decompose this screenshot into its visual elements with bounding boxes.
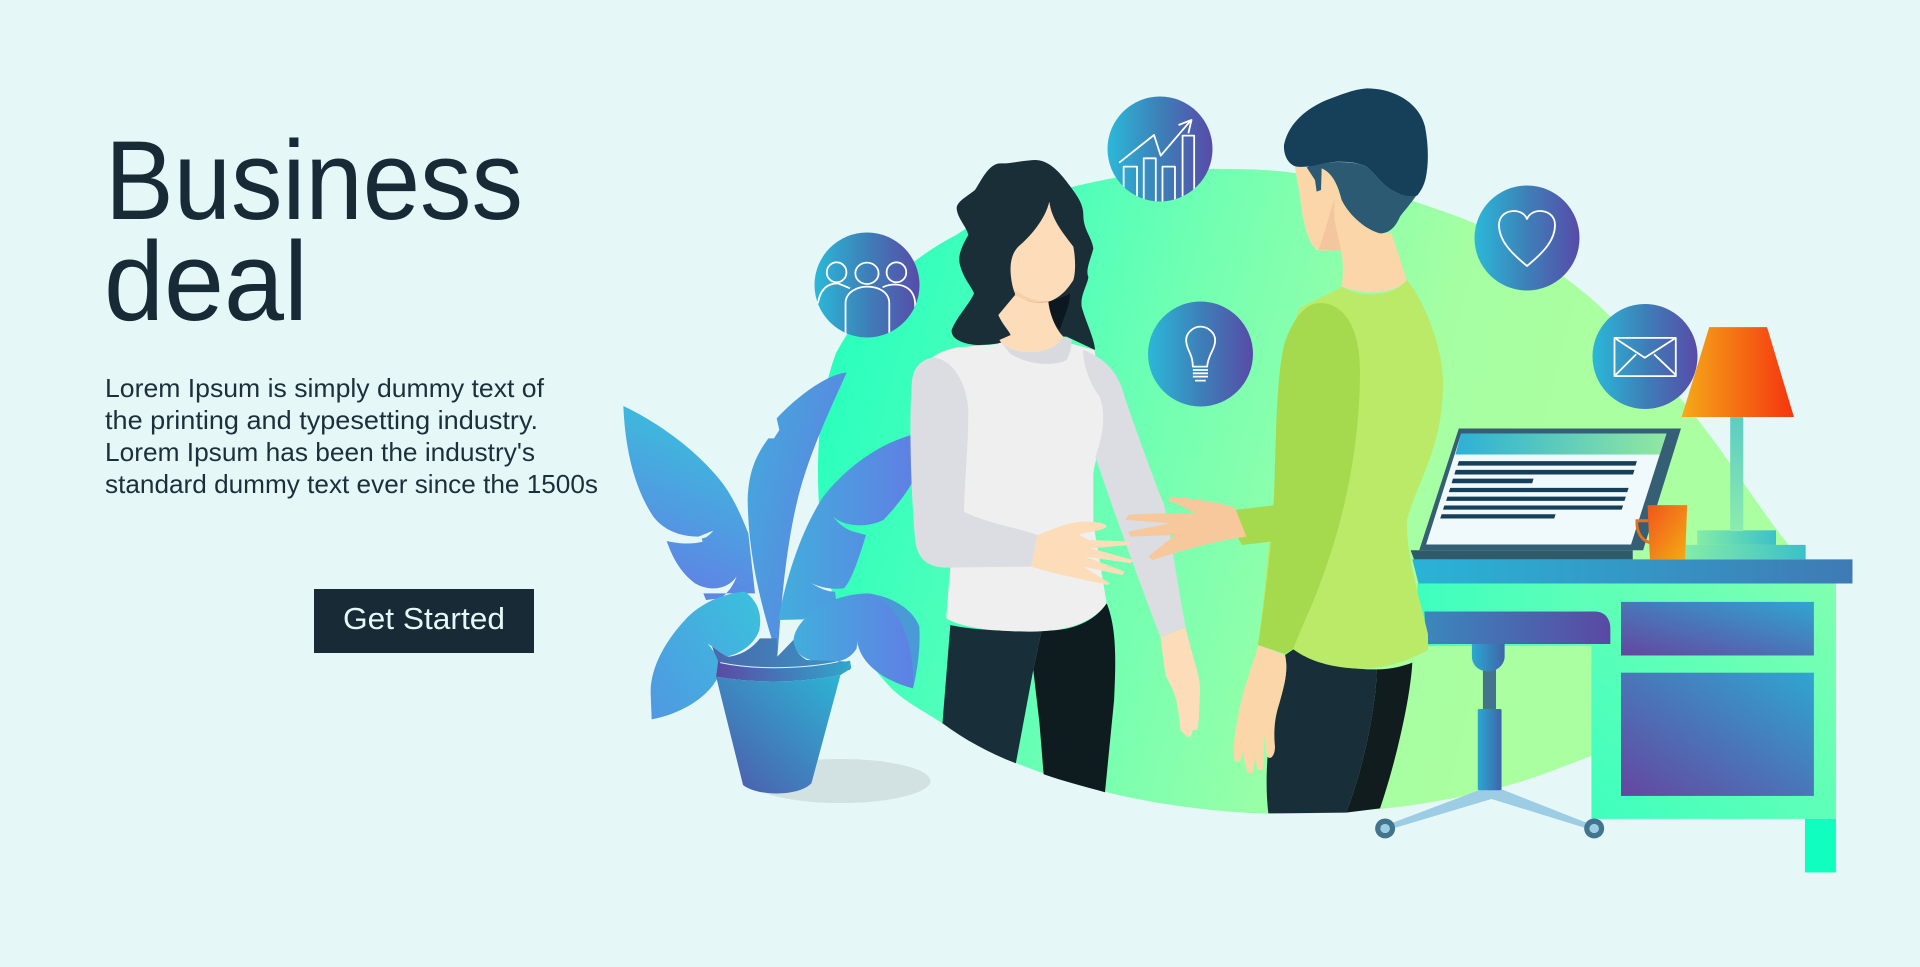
body text: the printing and typesetting industry. [105,405,538,435]
desk foot [1805,819,1836,872]
body text: standard dummy text ever since the 1500s [105,469,598,499]
button: get started: Get Started [343,601,505,636]
icon: growth chart [1108,96,1212,210]
woman hair [952,160,1095,350]
woman hands [1031,522,1200,737]
lamp [1682,327,1806,559]
left leaf [623,406,755,600]
body text: Lorem Ipsum has been the industry's [105,437,535,467]
mug [1637,505,1687,559]
body text: Lorem Ipsum is simply dummy text of [105,373,545,403]
upper drawer [1621,602,1814,655]
man shirt [1258,280,1443,669]
man trousers [1267,649,1412,813]
man hand [1126,497,1246,560]
laptop [1411,429,1681,559]
background green blob [818,169,1788,814]
leaves [623,373,920,719]
man [1126,88,1443,813]
body text [105,373,598,499]
title: Business [105,118,523,243]
chair [1375,611,1610,838]
desk cabinet [1591,584,1836,819]
lower left leaf [651,592,760,719]
tall centre leaf [748,373,847,657]
woman sweater [910,341,1185,638]
desk [1375,327,1852,872]
desk top [1412,559,1852,584]
man sleeve [1258,303,1360,654]
man other hand [1234,645,1286,773]
lower right leaf [793,593,913,688]
pot shadow [750,759,930,803]
icon: team of people [814,232,920,338]
right leaf [778,435,913,620]
woman [910,160,1200,792]
plant in pot [623,373,930,803]
icon: light bulb [1148,302,1253,406]
icon: heart [1474,186,1580,290]
desk under-top band [1417,584,1593,646]
button: get started [314,589,534,653]
lower drawer [1621,673,1814,796]
title [104,118,523,344]
woman face and neck [998,202,1075,364]
icon: envelope [1592,304,1698,409]
man cuff [1234,505,1276,545]
title: deal [104,219,308,344]
man neck and face [1284,88,1428,292]
lower right leaf fold [868,593,920,688]
woman trousers [942,603,1115,792]
pot [716,661,851,794]
pot soil [712,638,850,672]
